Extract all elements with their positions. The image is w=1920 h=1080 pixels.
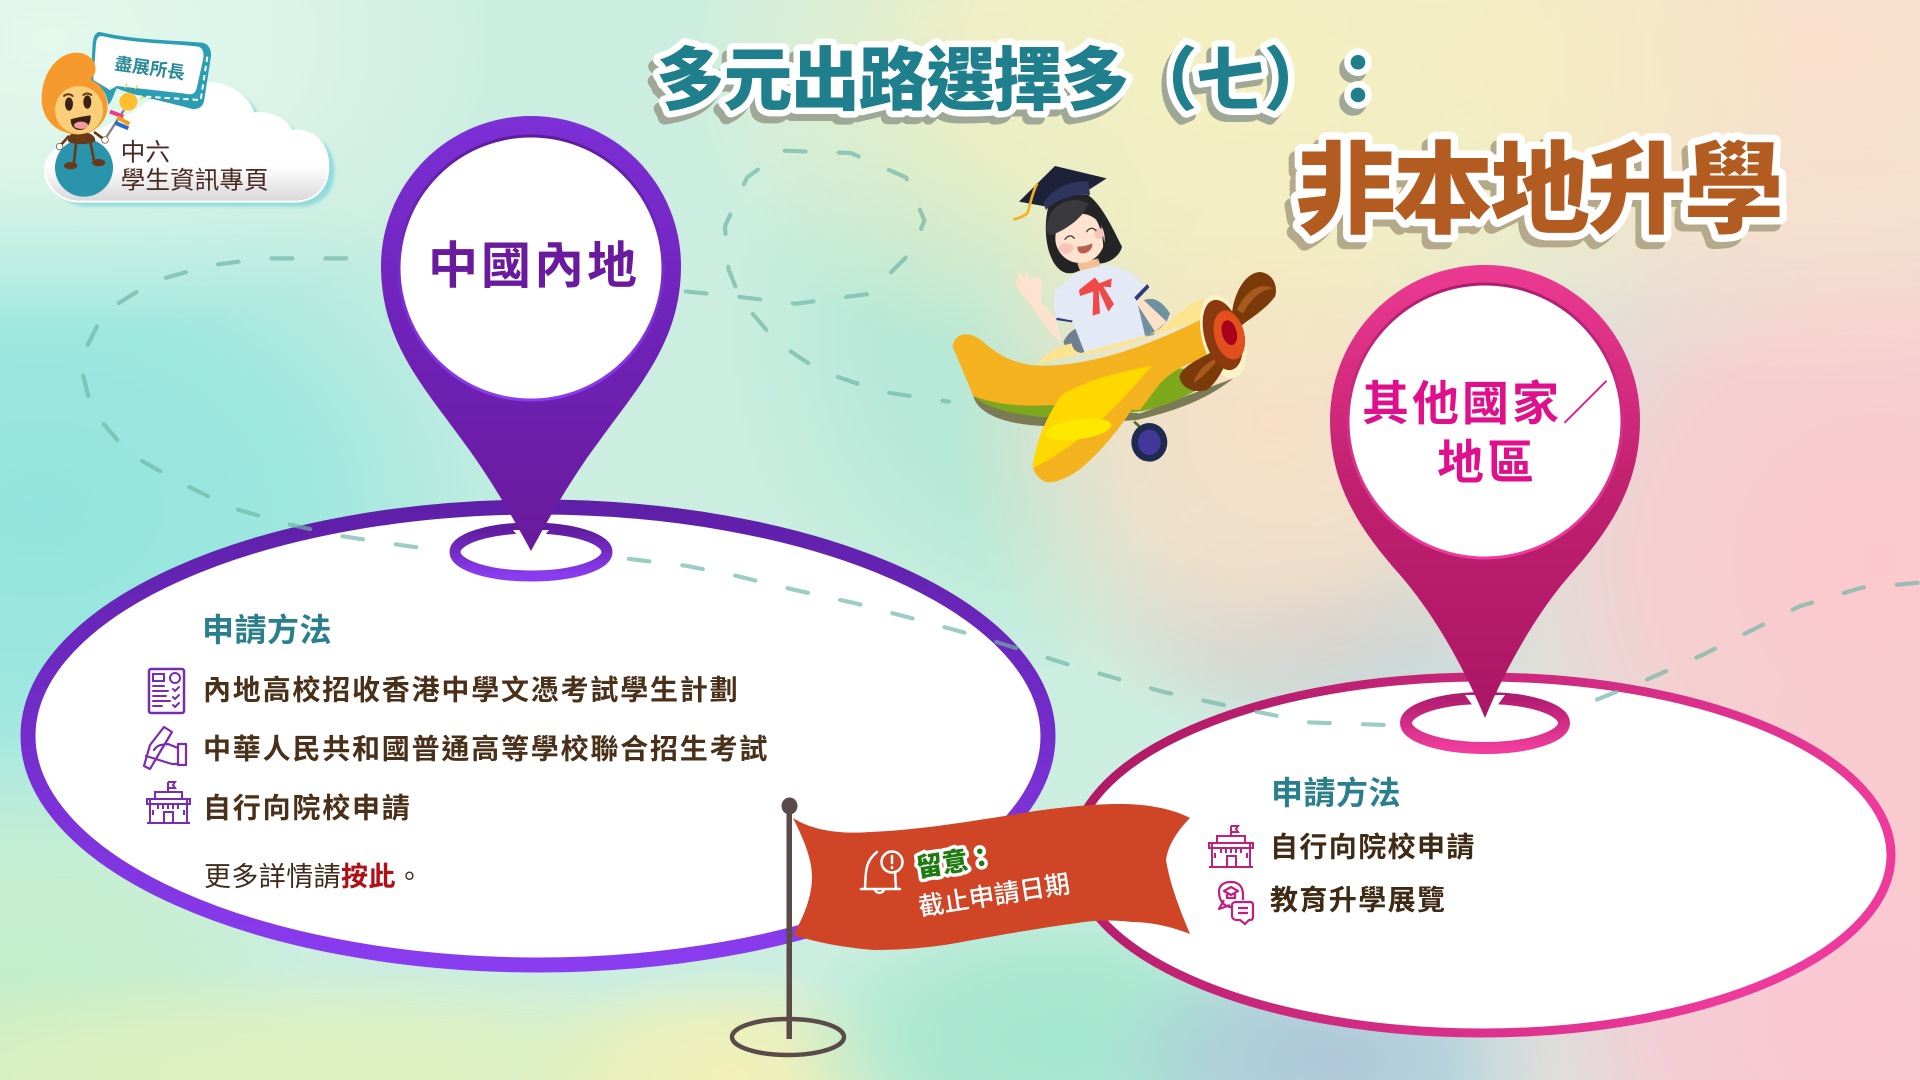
graduate girl [1015, 195, 1170, 354]
flag cloth [793, 804, 1190, 950]
icon: checklist [149, 669, 184, 713]
text block: left application methods [202, 612, 769, 892]
pin label: 其他國家／地區: 其他國家／ [1362, 376, 1612, 430]
text block: right application methods [1270, 775, 1476, 916]
logo text: 中六 [121, 139, 170, 167]
logo: student information page [42, 32, 334, 206]
flag base ring [732, 1019, 844, 1055]
subtitle: 非本地升學: 非本地升學 [1290, 142, 1775, 254]
cloud [45, 83, 334, 206]
icon: school building (right) [1209, 826, 1253, 867]
icon: alert bell [861, 852, 902, 893]
subtitle: 非本地升學: 非本地升學 [1296, 135, 1781, 247]
mascot [42, 53, 144, 169]
icon: school building (left) [147, 782, 190, 823]
panel: right ellipse (other regions) [1073, 677, 1891, 1033]
icon: hand writing [144, 727, 186, 769]
more details link text: 更多詳情請按此。 [204, 862, 423, 892]
item: education expo: 教育升學展覽 [1270, 884, 1446, 916]
title: 多元出路選擇多（七）：: 多元出路選擇多（七） ： [656, 42, 1391, 119]
airplane [953, 272, 1276, 482]
pin: mainland China [381, 116, 681, 576]
item: apply directly (right): 自行向院校申請 [1270, 832, 1476, 862]
panel: left ellipse (mainland) [28, 507, 1048, 965]
teal circle [55, 139, 113, 197]
flag pole [782, 798, 798, 1039]
heading: 申請方法 (left): 申請方法 [202, 612, 332, 648]
logo text: 學生資訊專頁 [121, 166, 269, 194]
speech bubble: 盡展所長 [91, 32, 211, 109]
heading: 申請方法 (right): 申請方法 [1271, 775, 1401, 811]
title: 多元出路選擇多（七）：: 多元出路選擇多（七） ： [651, 49, 1386, 126]
pin label: 其他國家／地區: 地區 [1437, 436, 1537, 488]
notice: deadline text: 截止申請日期 [917, 870, 1072, 922]
dashed flight path [80, 151, 1918, 725]
icon: speech bubbles with graduation cap [1219, 882, 1253, 924]
airplane with graduate [953, 166, 1276, 482]
notice: 留意: 留意： [914, 841, 996, 883]
item: joint entrance exam: 中華人民共和國普通高等學校聯合招生考試 [203, 734, 769, 764]
pin: other countries / regions [1330, 265, 1640, 748]
flag with deadline notice [732, 798, 1190, 1055]
item: apply directly: 自行向院校申請 [203, 792, 412, 824]
pin label: 中國內地: 中國內地 [428, 238, 640, 294]
graduation cap [1013, 166, 1107, 219]
speech bubble: 盡展所長: 盡展所長 [113, 53, 187, 83]
item: DSE scheme: 內地高校招收香港中學文憑考試學生計劃 [203, 674, 739, 706]
